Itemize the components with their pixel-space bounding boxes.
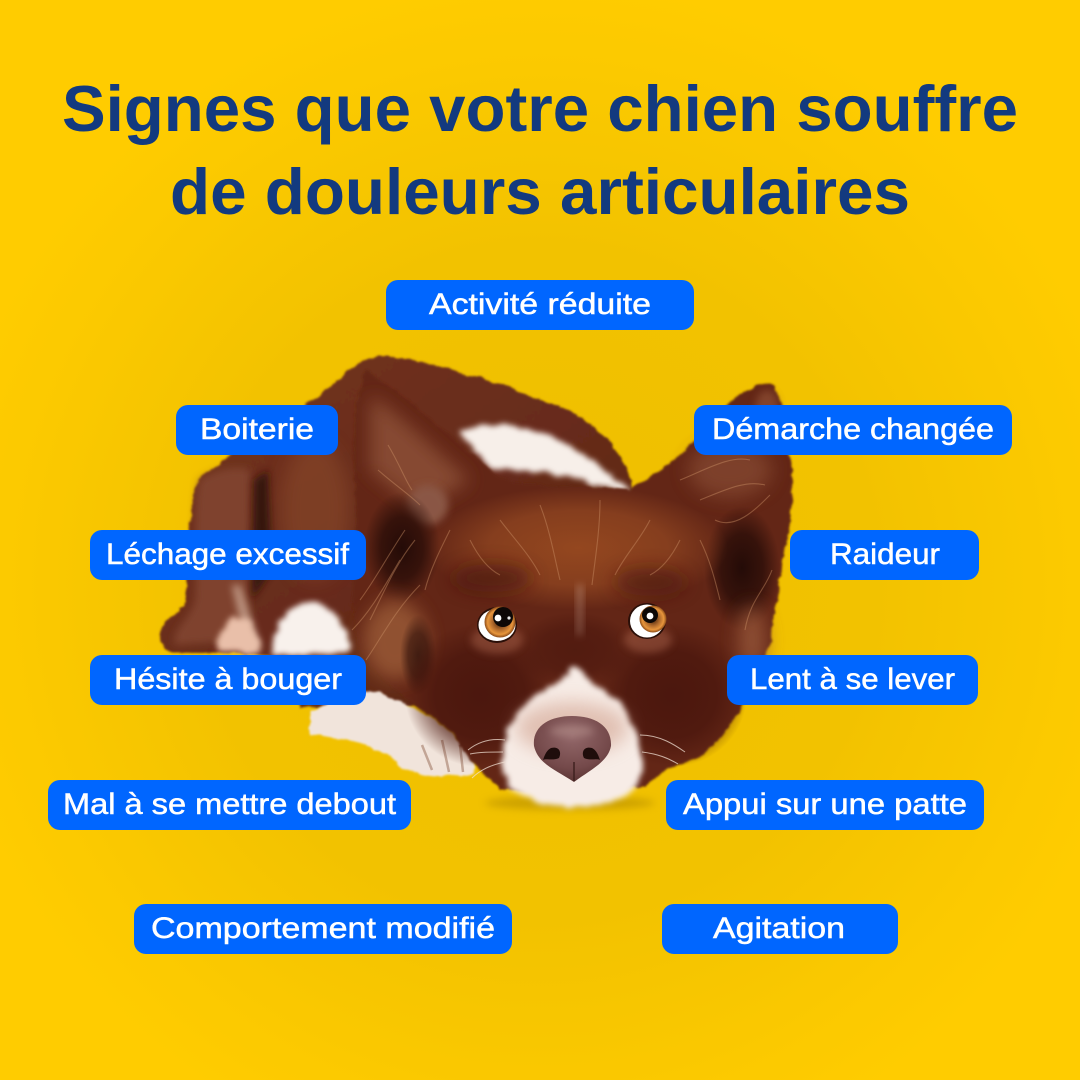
fur strands	[352, 445, 772, 660]
nose	[534, 716, 611, 782]
left ear upper fur	[370, 395, 470, 510]
illustration: dog lying down	[161, 356, 792, 810]
left cheek fur	[363, 600, 427, 680]
label: Activité réduite	[386, 280, 694, 330]
label: Raideur	[790, 530, 979, 580]
title	[62, 72, 1018, 228]
right eye	[628, 603, 666, 639]
left ear dark base	[364, 492, 440, 604]
white front leg and paw	[310, 692, 474, 776]
white shoulder patch	[458, 425, 630, 493]
label: Hésite à bouger: Hésite à bouger	[114, 663, 342, 696]
forehead	[428, 486, 728, 610]
muzzle white	[502, 666, 642, 807]
title: de douleurs articulaires	[170, 155, 910, 228]
floor shadow	[485, 796, 655, 810]
label: Léchage excessif	[90, 530, 366, 580]
whiskers	[468, 735, 685, 778]
label: Hésite à bouger	[90, 655, 366, 705]
blaze	[578, 585, 582, 635]
back fur highlight	[280, 440, 350, 580]
hind foot	[218, 618, 259, 654]
label: Boiterie: Boiterie	[200, 413, 314, 446]
label: Démarche changée	[694, 405, 1012, 455]
title: Signes que votre chien souffre	[62, 72, 1018, 145]
right edge fur	[738, 606, 766, 674]
label: Appui sur une patte: Appui sur une patte	[683, 788, 967, 821]
muzzle tint	[516, 702, 628, 754]
haunch shading	[174, 468, 250, 645]
label: Lent à se lever: Lent à se lever	[750, 663, 955, 696]
label: Appui sur une patte	[666, 780, 984, 830]
label: Boiterie	[176, 405, 338, 455]
label: Activité réduite: Activité réduite	[429, 288, 651, 321]
lower face shading	[405, 623, 555, 767]
dog body	[161, 356, 650, 708]
label: Comportement modifié: Comportement modifié	[151, 912, 495, 945]
label: Agitation	[662, 904, 898, 954]
label: Lent à se lever	[727, 655, 978, 705]
label: Léchage excessif: Léchage excessif	[106, 538, 350, 571]
label: Mal à se mettre debout	[48, 780, 411, 830]
white chest	[272, 602, 350, 654]
right ear dark centre	[704, 506, 780, 630]
label: Raideur: Raideur	[830, 538, 940, 571]
right ear upper fur	[688, 442, 772, 498]
head and ears silhouette	[353, 370, 792, 790]
label: Mal à se mettre debout: Mal à se mettre debout	[63, 788, 397, 821]
left eye	[477, 606, 517, 643]
brow shadows	[452, 564, 532, 592]
label: Agitation: Agitation	[713, 912, 845, 945]
eye sockets	[471, 626, 523, 654]
left ear inner pink	[408, 485, 448, 525]
label: Comportement modifié	[134, 904, 512, 954]
label: Démarche changée: Démarche changée	[712, 413, 994, 446]
